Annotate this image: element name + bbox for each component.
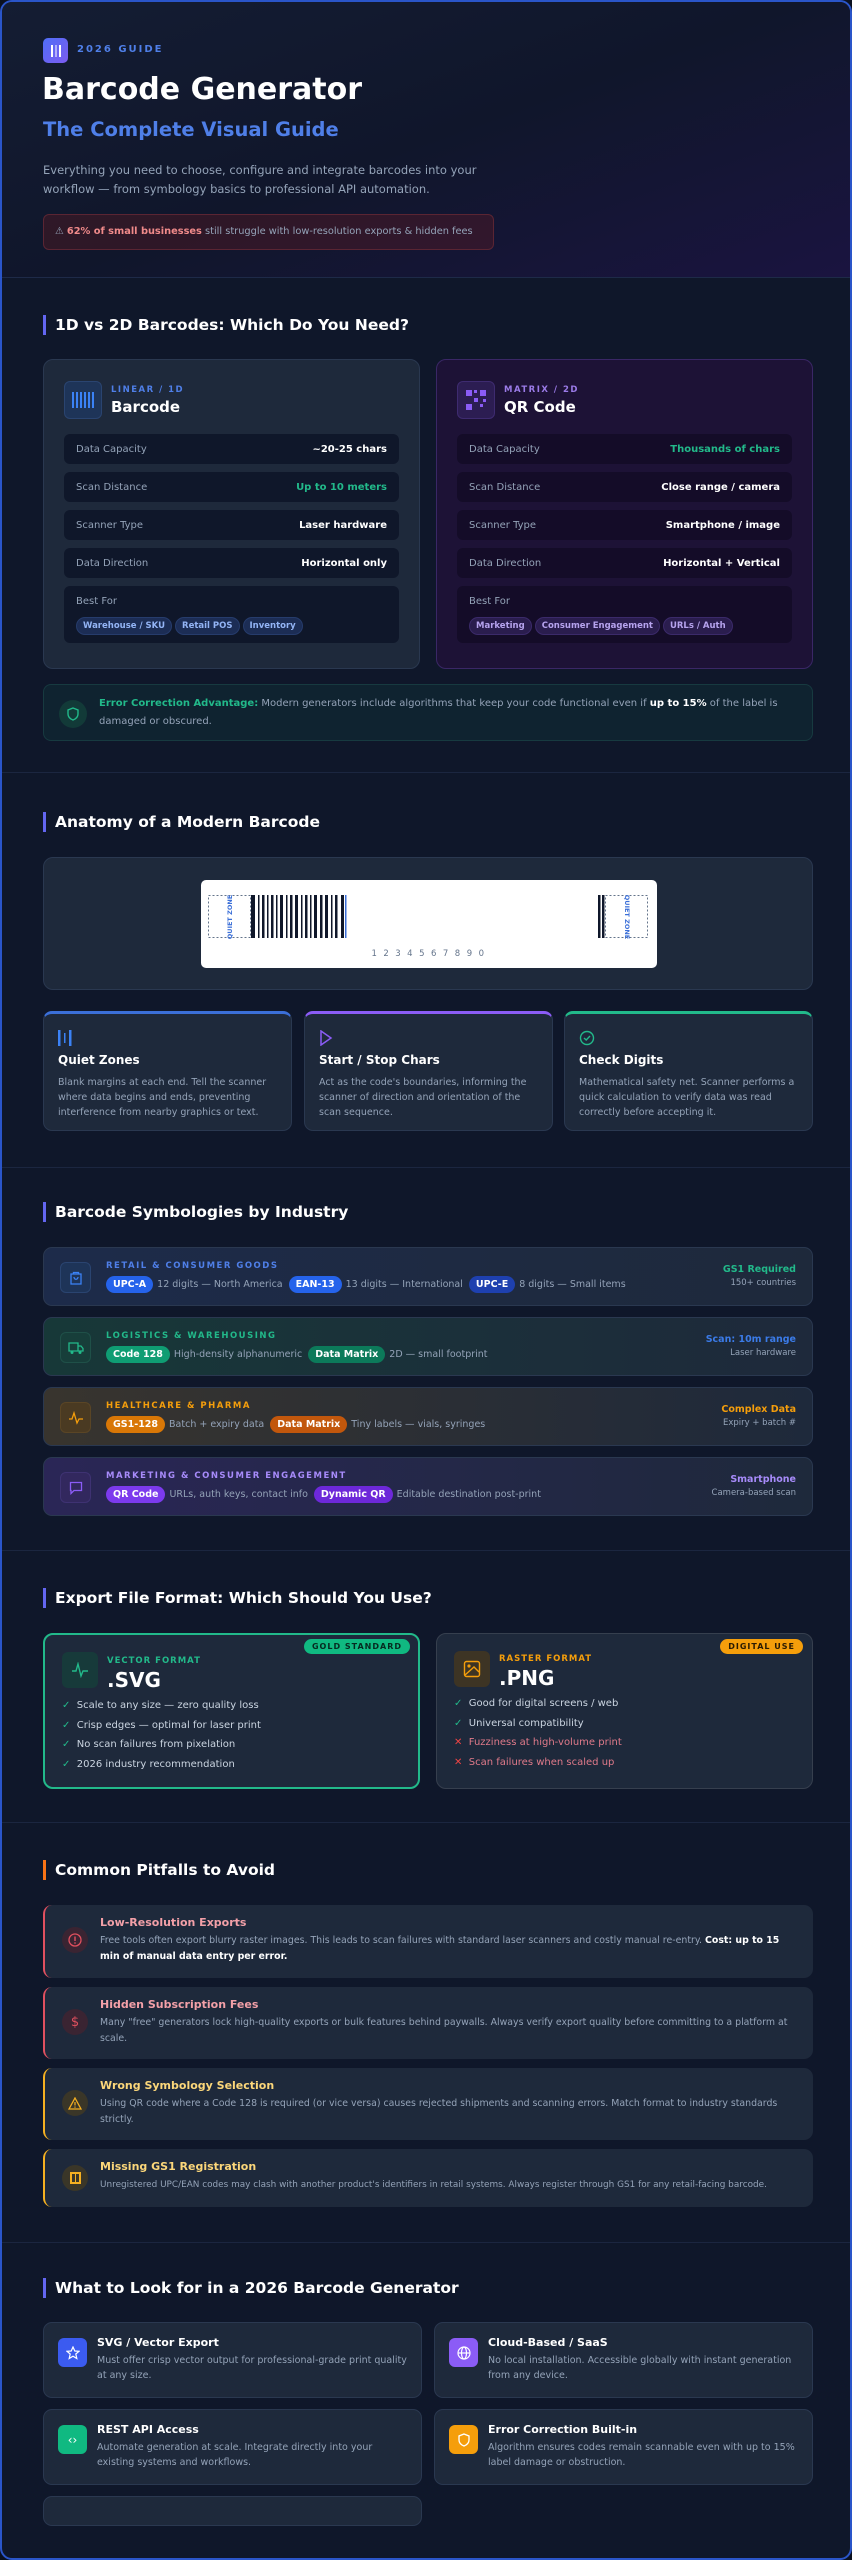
panel: 2D QR code: Scanner Type xyxy=(469,520,536,530)
row: retail: 150+ countries xyxy=(730,1278,796,1288)
panel: 2D QR code: MATRIX / 2D xyxy=(504,385,579,395)
panel: PNG xyxy=(436,1633,813,1789)
panel: 2D QR code: Best For xyxy=(469,596,510,607)
barcode illustration: QUIET ZONE xyxy=(623,895,631,939)
heading: 1D vs 2D: 1D vs 2D Barcodes: Which Do You Need? xyxy=(55,316,409,334)
row: retail: GS1 Required xyxy=(723,1264,796,1275)
card: check digits xyxy=(564,1011,813,1131)
barcode illustration xyxy=(201,880,657,968)
pitfall: wrong symbology: Using QR code where a Code 128 is required (or vice versa) causes rejected shipments and scanning errors. Match format to industry standards strictly. xyxy=(100,2098,777,2125)
panel: PNG: RASTER FORMAT xyxy=(499,1654,592,1664)
feature: SVG export: SVG / Vector Export xyxy=(97,2336,219,2349)
card: start/stop chars: Start / Stop Chars xyxy=(319,1053,440,1067)
icon: check circle xyxy=(580,1030,594,1046)
panel: 1D barcode: Data Direction xyxy=(76,558,148,568)
icon: bars xyxy=(58,1030,72,1046)
card: quiet zones: Quiet Zones xyxy=(58,1053,140,1067)
panel: PNG: ✓ Universal compatibility xyxy=(454,1718,584,1728)
row: marketing: Camera-based scan xyxy=(712,1488,796,1498)
heading: anatomy: Anatomy of a Modern Barcode xyxy=(55,813,320,831)
barcode illustration: 1234567890 xyxy=(371,949,491,959)
icon: pulse xyxy=(62,1652,98,1688)
panel: 1D barcode: Inventory xyxy=(250,621,296,631)
panel: 1D barcode: LINEAR / 1D xyxy=(111,385,184,395)
card: start/stop chars: Act as the code's boundaries, informing the scanner of direction and orientation of the scan sequence. xyxy=(319,1077,526,1118)
panel: 2D QR code: Horizontal + Vertical xyxy=(663,558,780,568)
pitfall: hidden fees: Hidden Subscription Fees xyxy=(100,1998,258,2011)
card: quiet zones xyxy=(43,1011,292,1131)
panel: 2D QR code: Data Direction xyxy=(469,558,541,568)
row: logistics: High-density alphanumeric 2D — small footprint xyxy=(174,1349,488,1360)
subtitle: The Complete Visual Guide xyxy=(43,118,339,141)
panel: 1D barcode: Retail POS xyxy=(182,621,233,631)
badge: digital use xyxy=(720,1639,803,1654)
pitfall: hidden fees: Many "free" generators lock high-quality exports or bulk features behind paywalls. Always verify export quality before committing to a platform at scale. xyxy=(100,2017,787,2044)
panel: 1D barcode: Warehouse / SKU xyxy=(83,621,165,631)
row: healthcare: Expiry + batch # xyxy=(723,1418,796,1428)
card: check digits: Mathematical safety net. Scanner performs a quick calculation to verify data was read correctly before accepting it. xyxy=(579,1077,794,1118)
heading: export format: Export File Format: Which Should You Use? xyxy=(55,1589,432,1607)
feature: REST API: Automate generation at scale. Integrate directly into your existing systems and workflows. xyxy=(97,2442,372,2468)
panel: 2D QR code: Close range / camera xyxy=(661,482,780,492)
tag: 2026 guide: 2026 GUIDE xyxy=(77,44,164,55)
pitfall: GS1: Unregistered UPC/EAN codes may clash with another product's identifiers in retail systems. Always register through GS1 for any retail-facing barcode. xyxy=(100,2180,767,2190)
row: retail: UPC-E xyxy=(476,1279,508,1290)
card: quiet zones: Blank margins at each end. Tell the scanner where data begins and ends, preventing interference from nearby graphics or text. xyxy=(58,1077,266,1118)
row: logistics: Laser hardware xyxy=(730,1348,796,1358)
heading: pitfalls: Common Pitfalls to Avoid xyxy=(55,1861,275,1879)
row: healthcare: Data Matrix xyxy=(277,1419,340,1430)
row: retail xyxy=(43,1247,813,1306)
panel: 1D barcode: Best For xyxy=(76,596,117,607)
pitfall: low resolution xyxy=(43,1905,813,1978)
feature: error correction: Algorithm ensures codes remain scannable even with up to 15% label damage or obstruction. xyxy=(488,2442,795,2468)
feature: cloud: No local installation. Accessible globally with instant generation from any device. xyxy=(488,2355,791,2381)
panel: 1D barcode: Barcode xyxy=(111,398,180,416)
row: retail: EAN-13 xyxy=(296,1279,335,1290)
hero section xyxy=(2,2,852,278)
feature: REST API: ‹› xyxy=(68,2432,77,2446)
row: marketing xyxy=(43,1457,813,1516)
panel: SVG: ✓ Scale to any size — zero quality loss xyxy=(62,1700,259,1711)
row: healthcare: Complex Data xyxy=(721,1404,796,1415)
feature: cloud: Cloud-Based / SaaS xyxy=(488,2336,608,2349)
panel: 1D barcode: Laser hardware xyxy=(299,520,387,530)
pitfall: hidden fees: $ xyxy=(71,2014,79,2030)
pitfall: wrong symbology xyxy=(43,2068,813,2140)
feature: SVG export: Must offer crisp vector output for professional-grade print quality at any size. xyxy=(97,2355,407,2381)
pitfall: hidden fees xyxy=(43,1987,813,2059)
icon: shield xyxy=(59,700,87,728)
row: healthcare: Batch + expiry data Tiny labels — vials, syringes xyxy=(169,1419,485,1430)
row: marketing: Smartphone xyxy=(730,1474,796,1485)
row: healthcare: HEALTHCARE & PHARMA xyxy=(106,1401,251,1411)
icon: image xyxy=(454,1651,490,1687)
feature: SVG export xyxy=(43,2322,422,2398)
panel: 2D QR code: Scan Distance xyxy=(469,482,540,492)
row: logistics: LOGISTICS & WAREHOUSING xyxy=(106,1331,276,1341)
row: retail: 12 digits — North America 13 digits — International 8 digits — Small items xyxy=(157,1279,626,1290)
row: logistics xyxy=(43,1317,813,1376)
panel: barcode diagram xyxy=(43,857,813,990)
title: Barcode Generator xyxy=(42,72,362,107)
feature: cloud xyxy=(434,2322,813,2398)
panel: SVG: ✓ No scan failures from pixelation xyxy=(62,1739,235,1750)
row: logistics: Code 128 xyxy=(113,1349,163,1360)
feature: REST API: REST API Access xyxy=(97,2423,199,2436)
panel: 2D QR code: Smartphone / image xyxy=(666,520,780,530)
pitfall: low resolution: Free tools often export blurry raster images. This leads to scan failures with standard laser scanners and costly manual re-entry. Cost: up to 15 min of manual data entry per error. xyxy=(100,1935,779,1962)
callout: error correction xyxy=(43,684,813,741)
panel: 1D barcode: Up to 10 meters xyxy=(296,482,387,492)
panel: 1D barcode xyxy=(43,359,420,669)
row: marketing: MARKETING & CONSUMER ENGAGEMENT xyxy=(106,1471,347,1481)
row: healthcare: GS1-128 xyxy=(113,1419,158,1430)
row: marketing: URLs, auth keys, contact info Editable destination post-print xyxy=(169,1489,541,1500)
card: check digits: Check Digits xyxy=(579,1053,663,1067)
panel: PNG: ✓ Good for digital screens / web xyxy=(454,1698,618,1709)
panel: 2D QR code xyxy=(436,359,813,669)
panel: PNG: ✕ Scan failures when scaled up xyxy=(454,1756,614,1768)
warning callout xyxy=(43,214,494,250)
panel: SVG: ✓ 2026 industry recommendation xyxy=(62,1758,235,1770)
row: marketing: Dynamic QR xyxy=(321,1489,386,1500)
panel: 2D QR code: Marketing xyxy=(476,621,525,631)
panel: 2D QR code: Thousands of chars xyxy=(670,444,780,454)
panel: SVG: ✓ Crisp edges — optimal for laser print xyxy=(62,1720,261,1730)
panel: 2D QR code: QR Code xyxy=(504,398,576,416)
icon: barcode xyxy=(64,381,102,419)
icon: play xyxy=(320,1030,332,1046)
panel: 1D barcode: Scanner Type xyxy=(76,520,143,530)
panel: PNG: .PNG xyxy=(499,1666,554,1690)
panel: 2D QR code: URLs / Auth xyxy=(670,621,726,631)
panel: 1D barcode: Scan Distance xyxy=(76,482,147,492)
heading: symbologies: Barcode Symbologies by Industry xyxy=(55,1203,348,1221)
panel: SVG: .SVG xyxy=(107,1668,161,1692)
panel: 1D barcode: ~20-25 chars xyxy=(312,444,387,454)
badge: gold standard xyxy=(304,1639,410,1654)
feature: REST API xyxy=(43,2409,422,2485)
row: marketing: QR Code xyxy=(113,1489,158,1500)
warning callout: ⚠ 62% of small businesses still struggle with low-resolution exports & hidden fees xyxy=(55,226,473,237)
panel: PNG: ✕ Fuzziness at high-volume print xyxy=(454,1737,622,1748)
icon: guide badge xyxy=(43,38,68,63)
heading: what to look for: What to Look for in a 2026 Barcode Generator xyxy=(55,2279,459,2297)
badge: gold standard: GOLD STANDARD xyxy=(312,1642,402,1651)
pitfall: low resolution: Low-Resolution Exports xyxy=(100,1916,246,1929)
row: logistics: Scan: 10m range xyxy=(706,1334,796,1345)
pitfall: wrong symbology: Wrong Symbology Selection xyxy=(100,2079,274,2092)
feature: error correction xyxy=(434,2409,813,2485)
icon: qr xyxy=(457,381,495,419)
feature: empty placeholder xyxy=(43,2496,422,2526)
panel: 2D QR code: Data Capacity xyxy=(469,444,540,454)
badge: digital use: DIGITAL USE xyxy=(728,1642,795,1651)
callout: error correction: Error Correction Advantage: Modern generators include algorithms that keep your code functional even if up to 15% of the label is damaged or obscured. xyxy=(99,698,778,727)
card: start/stop chars xyxy=(304,1011,553,1131)
barcode illustration: QUIET ZONE xyxy=(226,895,234,939)
row: retail: RETAIL & CONSUMER GOODS xyxy=(106,1261,278,1271)
panel: 1D barcode: Horizontal only xyxy=(301,558,387,568)
pitfall: GS1: Missing GS1 Registration xyxy=(100,2160,256,2173)
panel: 1D barcode: Data Capacity xyxy=(76,444,147,454)
row: healthcare xyxy=(43,1387,813,1446)
row: logistics: Data Matrix xyxy=(315,1349,378,1360)
row: retail: UPC-A xyxy=(113,1279,146,1290)
pitfall: GS1 xyxy=(43,2149,813,2207)
panel: 2D QR code: Consumer Engagement xyxy=(542,621,653,631)
panel: SVG xyxy=(43,1633,420,1789)
feature: error correction: Error Correction Built-in xyxy=(488,2423,637,2436)
panel: SVG: VECTOR FORMAT xyxy=(107,1656,201,1666)
intro paragraph: Everything you need to choose, configure and integrate barcodes into your workflow — from symbology basics to professional API automation. xyxy=(43,163,476,196)
